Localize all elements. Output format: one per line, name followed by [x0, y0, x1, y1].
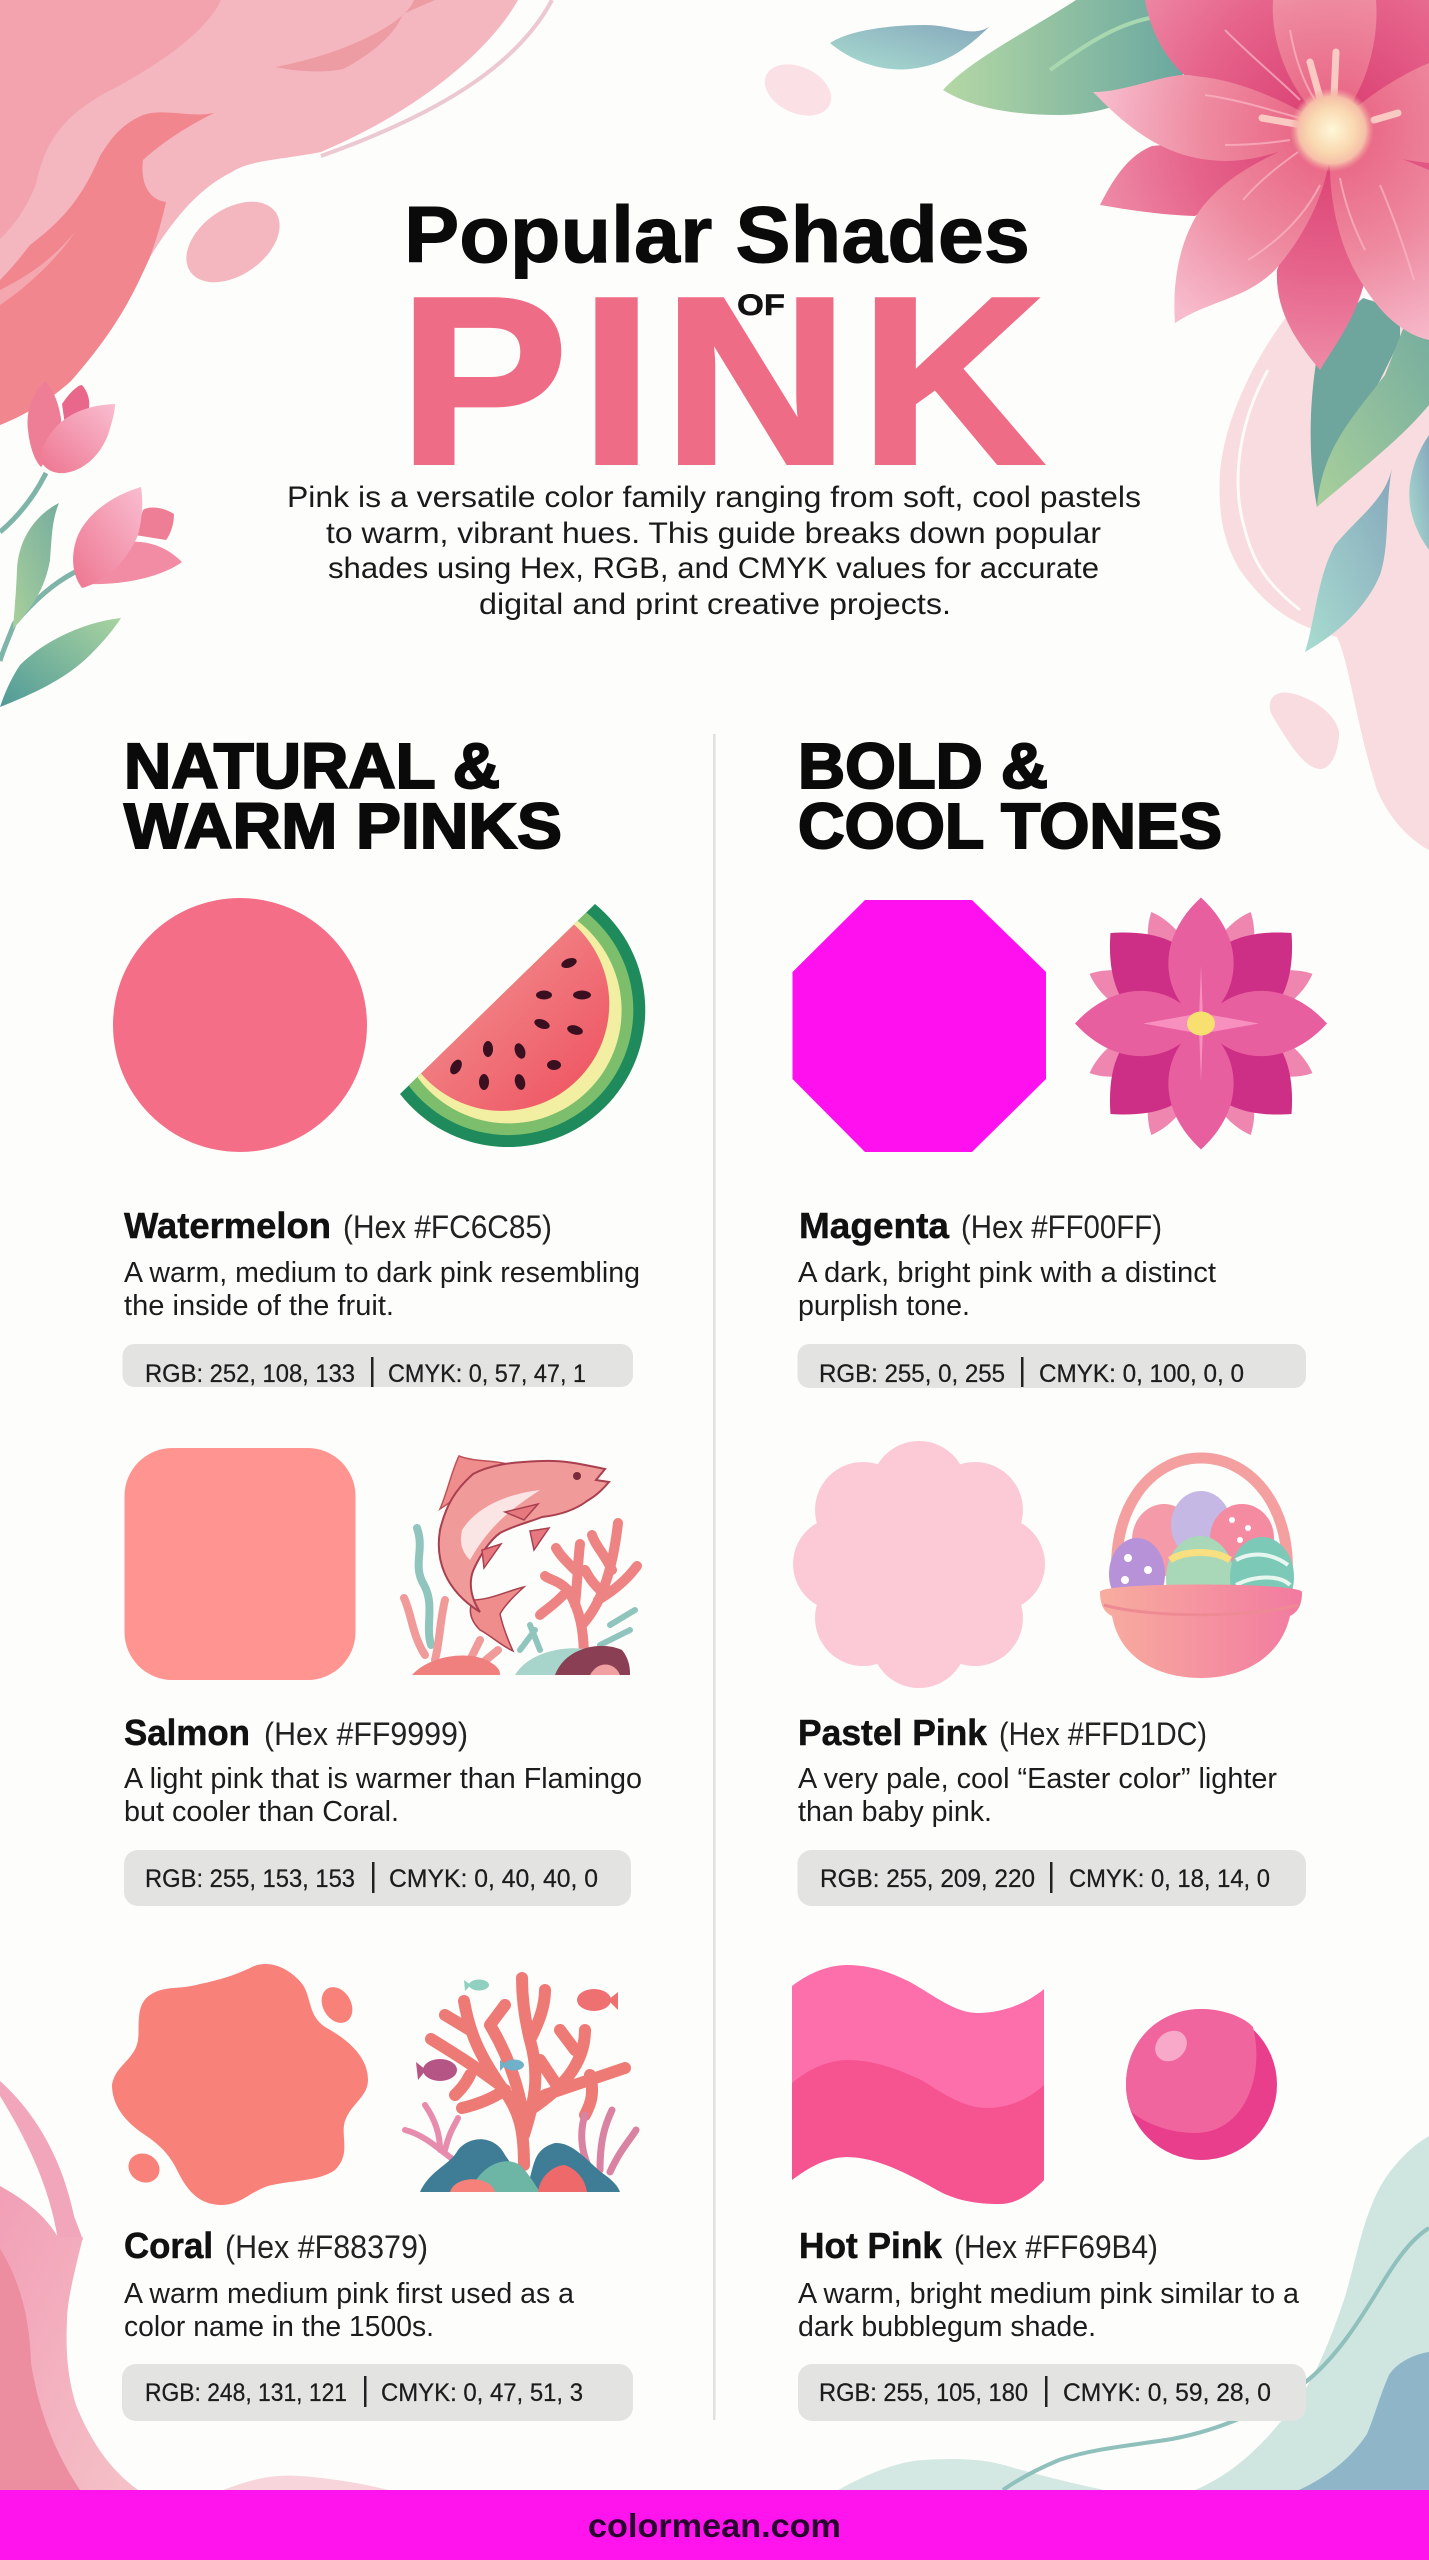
text: magenta: purplish tone. [798, 1290, 970, 1322]
chip: magenta values [798, 1344, 1306, 1388]
text: magenta: (Hex #FF00FF) [961, 1209, 1162, 1245]
text: pastel pink: (Hex #FFD1DC) [999, 1716, 1207, 1752]
footer bar [0, 2490, 1429, 2560]
decoration: top-left pink wash [0, 0, 552, 425]
chip: salmon values: CMYK: 0, 40, 40, 0 [389, 1865, 598, 1893]
text: salmon: (Hex #FF9999) [264, 1716, 468, 1752]
chip: coral values: RGB: 248, 131, 121 [145, 2379, 347, 2407]
icon: easter egg basket [1100, 1458, 1302, 1678]
decoration: bottom-left wash [0, 2081, 388, 2490]
chip: pastel pink values: CMYK: 0, 18, 14, 0 [1069, 1865, 1270, 1893]
intro text: Pink is a versatile color family ranging from soft, cool pastels [287, 481, 1141, 514]
text: hot pink: dark bubblegum shade. [798, 2311, 1096, 2343]
text: watermelon: Watermelon [124, 1205, 331, 1246]
column divider [713, 734, 716, 2420]
decoration: right pink strip [1220, 300, 1429, 850]
intro text: shades using Hex, RGB, and CMYK values for accurate [328, 552, 1099, 585]
decoration: top-right leaves [757, 0, 1429, 652]
text: salmon: A light pink that is warmer than Flamingo [124, 1763, 642, 1795]
column heading: bold and cool tones: COOL TONES [798, 790, 1222, 862]
title [399, 190, 1044, 514]
text: watermelon: the inside of the fruit. [124, 1290, 394, 1322]
icon: magenta flower [1075, 898, 1327, 1150]
text: salmon [124, 1712, 642, 1828]
text: hot pink [798, 2225, 1300, 2343]
text: salmon: Salmon [124, 1712, 250, 1753]
text: pastel pink: A very pale, cool “Easter color” lighter [798, 1763, 1277, 1795]
text: hot pink: Hot Pink [799, 2225, 943, 2266]
footer text: colormean.com [588, 2507, 841, 2544]
chip: magenta values: RGB: 255, 0, 255 [819, 1360, 1005, 1388]
intro text [287, 481, 1141, 621]
column heading: natural and warm pinks [124, 730, 562, 862]
decoration: left tulips [0, 381, 182, 707]
chip: watermelon values [122, 1344, 633, 1388]
swatch: salmon rounded square [124, 1448, 356, 1680]
text: hot pink: A warm, bright medium pink similar to a [798, 2278, 1300, 2310]
decoration: large flower top right [1093, 0, 1429, 370]
panel: natural and warm pinks [112, 730, 645, 2421]
decoration: bottom-right wash [838, 2136, 1429, 2490]
icon: hot pink bubblegum ball [1126, 2009, 1277, 2160]
text: coral: color name in the 1500s. [124, 2311, 434, 2343]
chip: hot pink values: CMYK: 0, 59, 28, 0 [1063, 2379, 1271, 2407]
text: watermelon: (Hex #FC6C85) [343, 1209, 552, 1245]
text: coral [124, 2225, 575, 2343]
heading: PINK: N [663, 249, 849, 514]
swatch: coral blob [112, 1964, 368, 2205]
column heading: natural and warm pinks: NATURAL & [124, 730, 500, 802]
intro text: digital and print creative projects. [479, 588, 951, 621]
intro text: to warm, vibrant hues. This guide breaks down popular [326, 517, 1101, 550]
text: hot pink: (Hex #FF69B4) [954, 2229, 1158, 2265]
icon: salmon fish and coral [404, 1456, 637, 1675]
heading: PINK: I [580, 249, 653, 514]
text: pastel pink [798, 1712, 1277, 1828]
heading: PINK: P [399, 249, 568, 514]
chip: hot pink values: RGB: 255, 105, 180 [819, 2379, 1028, 2407]
swatch: pastel pink scallop [793, 1441, 1045, 1688]
chip: salmon values: RGB: 255, 153, 153 [145, 1865, 355, 1893]
swatch: hot pink wave flag [792, 1965, 1044, 2204]
chip: magenta values: CMYK: 0, 100, 0, 0 [1039, 1360, 1244, 1388]
heading: PINK [399, 249, 1044, 514]
text: magenta [798, 1205, 1216, 1322]
text: watermelon: A warm, medium to dark pink resembling [124, 1257, 640, 1289]
chip: salmon values [124, 1850, 631, 1906]
swatch: magenta octagon [792, 900, 1046, 1152]
column heading: natural and warm pinks: WARM PINKS [124, 790, 562, 862]
icon: watermelon slice [400, 904, 645, 1147]
column heading: bold and cool tones: BOLD & [798, 730, 1048, 802]
text: salmon: but cooler than Coral. [124, 1796, 399, 1828]
heading: Popular Shades: Popular Shades [404, 190, 1030, 279]
text: watermelon [124, 1205, 640, 1322]
chip: watermelon values: RGB: 252, 108, 133 [145, 1360, 355, 1388]
text: coral: (Hex #F88379) [225, 2229, 428, 2265]
chip: pastel pink values [798, 1850, 1306, 1906]
heading: PINK: K [860, 249, 1044, 514]
panel: bold and cool tones [792, 730, 1327, 2421]
text: magenta: A dark, bright pink with a distinct [798, 1257, 1216, 1289]
chip: pastel pink values: RGB: 255, 209, 220 [820, 1865, 1035, 1893]
text: coral: A warm medium pink first used as a [124, 2278, 575, 2310]
chip: coral values [122, 2364, 633, 2421]
chip: coral values: CMYK: 0, 47, 51, 3 [381, 2379, 583, 2407]
column heading: bold and cool tones [798, 730, 1222, 862]
chip: hot pink values [798, 2364, 1306, 2421]
text: pastel pink: Pastel Pink [798, 1712, 988, 1753]
text: pastel pink: than baby pink. [798, 1796, 992, 1828]
icon: coral reef [405, 1978, 636, 2192]
text: coral: Coral [124, 2225, 213, 2266]
heading: OF: OF [737, 289, 785, 322]
swatch: watermelon circle [113, 898, 367, 1152]
chip: watermelon values: CMYK: 0, 57, 47, 1 [388, 1360, 586, 1388]
text: magenta: Magenta [799, 1205, 950, 1246]
